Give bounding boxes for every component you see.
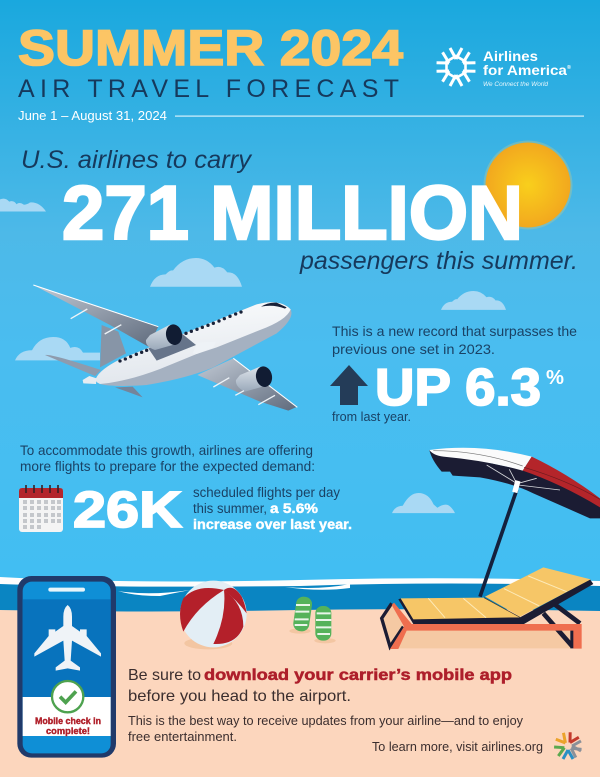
record text line 2: previous one set in 2023. <box>332 341 495 357</box>
flights highlight: a 5.6% <box>270 501 318 516</box>
umbrella pole <box>480 490 517 597</box>
app message highlight: download your carrier’s mobile app <box>204 667 512 684</box>
tail fin <box>100 325 126 367</box>
record text: This is a new record that surpasses the <box>332 323 577 339</box>
lounger rear legs <box>543 603 580 648</box>
phone case <box>17 576 116 758</box>
headline number: 271 MILLION <box>62 171 523 256</box>
headline end: passengers this summer. <box>299 247 578 275</box>
umbrella white panel <box>429 448 532 471</box>
lounger shade <box>392 627 580 648</box>
flap fairings <box>71 309 275 405</box>
lower wing <box>197 358 297 411</box>
beach umbrella and lounger <box>382 448 600 649</box>
cloud: right of plane <box>441 291 506 310</box>
engine lower <box>236 367 268 392</box>
footer link: To learn more, visit airlines.org <box>372 740 543 754</box>
phone screen <box>23 582 111 753</box>
cockpit <box>261 303 287 309</box>
cloud: above plane <box>150 258 242 287</box>
near wing root <box>148 333 196 361</box>
phone caption: Mobile check in <box>35 716 101 726</box>
icon: star logo <box>437 48 475 86</box>
growth text: To accommodate this growth, airlines are offering <box>20 442 313 458</box>
app message: Be sure to <box>128 667 201 684</box>
growth text line 2: more flights to prepare for the expected demand: <box>20 458 315 474</box>
sand <box>0 609 600 777</box>
umbrella red panel <box>523 457 600 507</box>
subtitle: air travel forecast: AIR TRAVEL FORECAST <box>18 75 399 103</box>
stat percent sign: % <box>546 367 564 389</box>
from last year: from last year. <box>332 409 411 424</box>
phone white band <box>23 697 111 736</box>
phone caption line 2: complete! <box>46 726 90 736</box>
ball shadow <box>184 637 232 649</box>
fuselage <box>96 302 291 386</box>
icon: colour logo <box>554 732 582 759</box>
icon: calendar <box>19 485 63 532</box>
tail stabiliser <box>45 355 101 376</box>
stat: 26k: 26K <box>73 481 182 538</box>
lounger black edge <box>398 579 593 624</box>
flip-flops <box>289 596 336 643</box>
umbrella underside <box>429 450 600 518</box>
headline lead: U.S. airlines to carry <box>21 146 253 174</box>
title: summer 2024: SUMMER 2024 <box>18 20 403 76</box>
phone <box>17 576 116 758</box>
lounger back <box>485 567 591 617</box>
flights highlight line 2: increase over last year. <box>193 517 352 532</box>
lower stabiliser <box>115 387 143 397</box>
lounger seat <box>401 598 520 619</box>
app detail line 2: free entertainment. <box>128 730 237 744</box>
wave <box>0 577 600 587</box>
flights text: scheduled flights per day <box>193 485 340 500</box>
lounger salmon frame <box>390 603 582 649</box>
umbrella ribs <box>487 465 560 490</box>
phone speaker <box>48 588 85 592</box>
logo: airlines for america <box>437 48 571 88</box>
stat: up 6.3: UP 6.3 <box>375 359 541 417</box>
cloud: lower right <box>392 493 455 513</box>
phone plane icon <box>34 605 101 671</box>
logo wordmark line 2: for America <box>483 63 558 78</box>
lounger front frame <box>382 603 403 647</box>
logo tagline: We Connect the World <box>483 81 548 88</box>
check badge <box>52 681 83 712</box>
cloud: top left <box>0 199 46 212</box>
logo wordmark line 2: ® <box>567 64 571 71</box>
app detail: This is the best way to receive updates from your airline—and to enjoy <box>128 714 524 728</box>
engine upper <box>146 325 178 350</box>
windows <box>118 310 243 363</box>
date rule <box>175 116 584 117</box>
cloud: behind plane <box>15 337 100 360</box>
far wing <box>33 285 158 347</box>
logo wordmark: Airlines <box>483 49 538 64</box>
app message line 2: before you head to the airport. <box>128 688 351 705</box>
date range: June 1 – August 31, 2024 <box>18 109 167 123</box>
flights text line 2: this summer, <box>193 501 267 516</box>
sun <box>484 140 572 230</box>
beach ball <box>180 581 336 649</box>
thin wave <box>118 584 350 596</box>
ball red panels <box>180 588 224 632</box>
sea <box>0 579 600 613</box>
icon: up arrow <box>330 365 368 405</box>
airplane illustration <box>33 285 297 411</box>
